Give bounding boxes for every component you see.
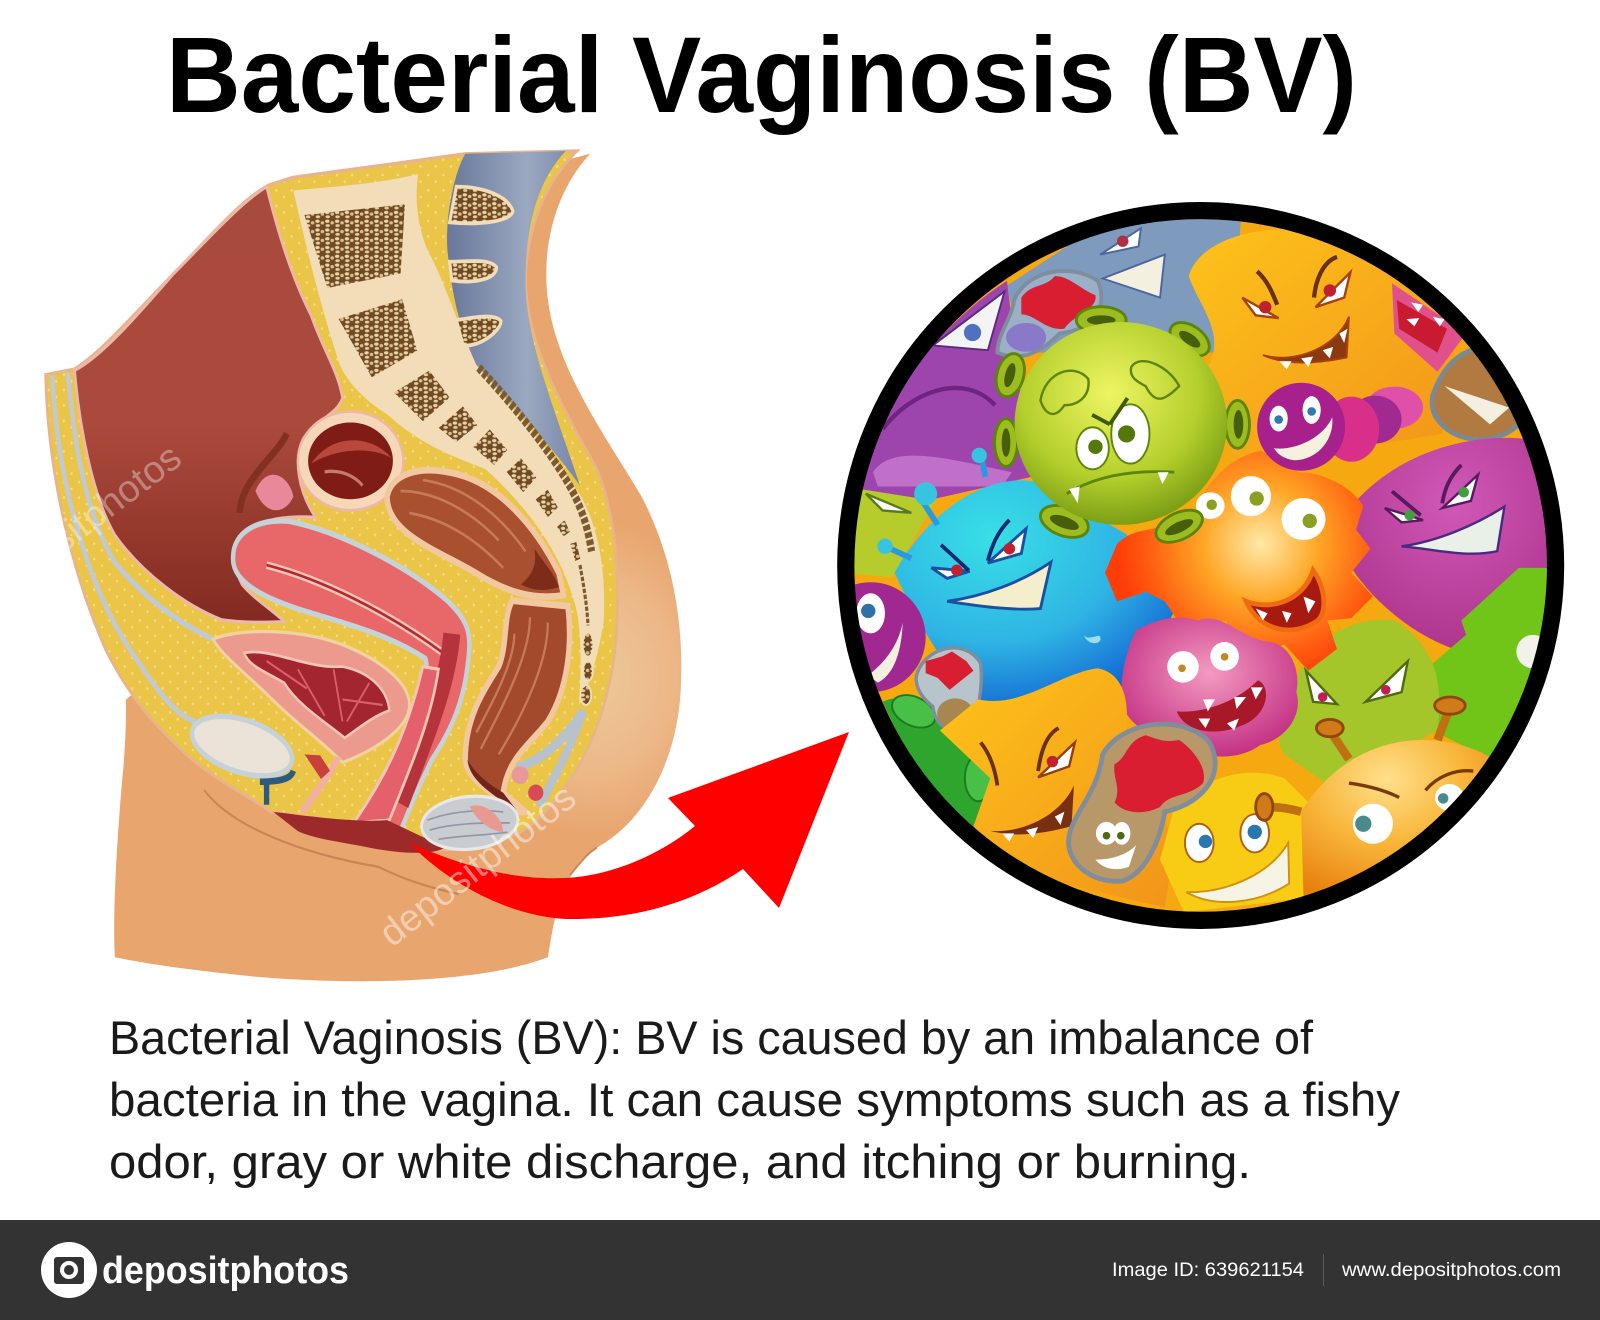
icon: camera logo [41, 1242, 97, 1298]
pink toothy microbe [1392, 283, 1466, 372]
anal sphincter [420, 792, 519, 853]
microbes circle [816, 190, 1576, 936]
magenta left microbe [854, 582, 926, 692]
skin creases [204, 790, 597, 894]
clitoral vessel [260, 771, 293, 805]
image id: Image ID: 639621154 [1112, 1260, 1304, 1281]
description text: odor, gray or white discharge, and itching or burning. [109, 1135, 1251, 1188]
spine cream band [293, 174, 604, 705]
title: Bacterial Vaginosis (BV) [166, 14, 1357, 135]
grey-blue microbe [1007, 214, 1241, 353]
uterus [233, 521, 469, 831]
pelvic floor muscle [512, 710, 584, 806]
bowel loop [298, 412, 403, 510]
lime bottom microbe [1279, 620, 1439, 788]
circle border [846, 211, 1556, 920]
urethra [302, 757, 338, 812]
footer bar [0, 1220, 1600, 1320]
divider [1323, 1254, 1324, 1286]
base fill [854, 221, 1523, 912]
rectum [465, 601, 569, 812]
sigmoid colon [387, 470, 563, 597]
pubic bone [187, 705, 297, 787]
green bottom-left microbe [883, 689, 992, 831]
spinal processes [450, 187, 513, 346]
capsule top right [1432, 348, 1519, 439]
anatomy: sagittal cross-section of female pelvis [46, 151, 681, 981]
description text [109, 1011, 1401, 1188]
orange top microbe [1189, 229, 1457, 467]
ovary and fallopian tube [240, 433, 293, 513]
cyan microbe [877, 448, 1174, 707]
watermark [0, 436, 584, 955]
bladder [213, 631, 409, 763]
red arrow [408, 732, 849, 919]
yellow bottom microbe [1160, 773, 1313, 912]
vertebrae [303, 203, 593, 705]
watermark: depositphotos [372, 776, 584, 955]
logo wordmark: depositphotos [102, 1250, 349, 1292]
small capsule left [916, 648, 981, 730]
orange bottom-right microbe [1256, 697, 1492, 898]
magenta right microbe [1351, 438, 1557, 654]
yellow fat tissue [46, 151, 618, 850]
capsule with red germ, top [997, 271, 1101, 356]
description text: Bacterial Vaginosis (BV): BV is caused by an imbalance of [109, 1011, 1314, 1064]
green slime microbe [1432, 568, 1547, 757]
description text: bacteria in the vagina. It can cause symptoms such as a fishy [109, 1073, 1401, 1126]
lime microbe left [854, 490, 935, 578]
abdominal wall muscle strands [52, 373, 213, 721]
grey back muscle [447, 151, 580, 486]
lens contents [854, 219, 1547, 912]
green virus microbe [992, 307, 1249, 549]
pink bumpy microbe [1121, 618, 1298, 757]
spinal nerve line [479, 368, 592, 551]
orange splat microbe [1105, 451, 1373, 671]
vagina [354, 667, 438, 823]
purple microbe [849, 281, 1031, 501]
magenta worm microbe [1257, 383, 1423, 471]
yellow-orange bottom-left microbe [940, 668, 1174, 907]
capsule with red germ, bottom [1069, 724, 1215, 881]
body skin silhouette [114, 154, 681, 981]
abdominal cavity [75, 187, 342, 622]
clitoris [305, 754, 330, 779]
website: www.depositphotos.com [1341, 1260, 1561, 1281]
vulva dark tissue [273, 812, 445, 853]
